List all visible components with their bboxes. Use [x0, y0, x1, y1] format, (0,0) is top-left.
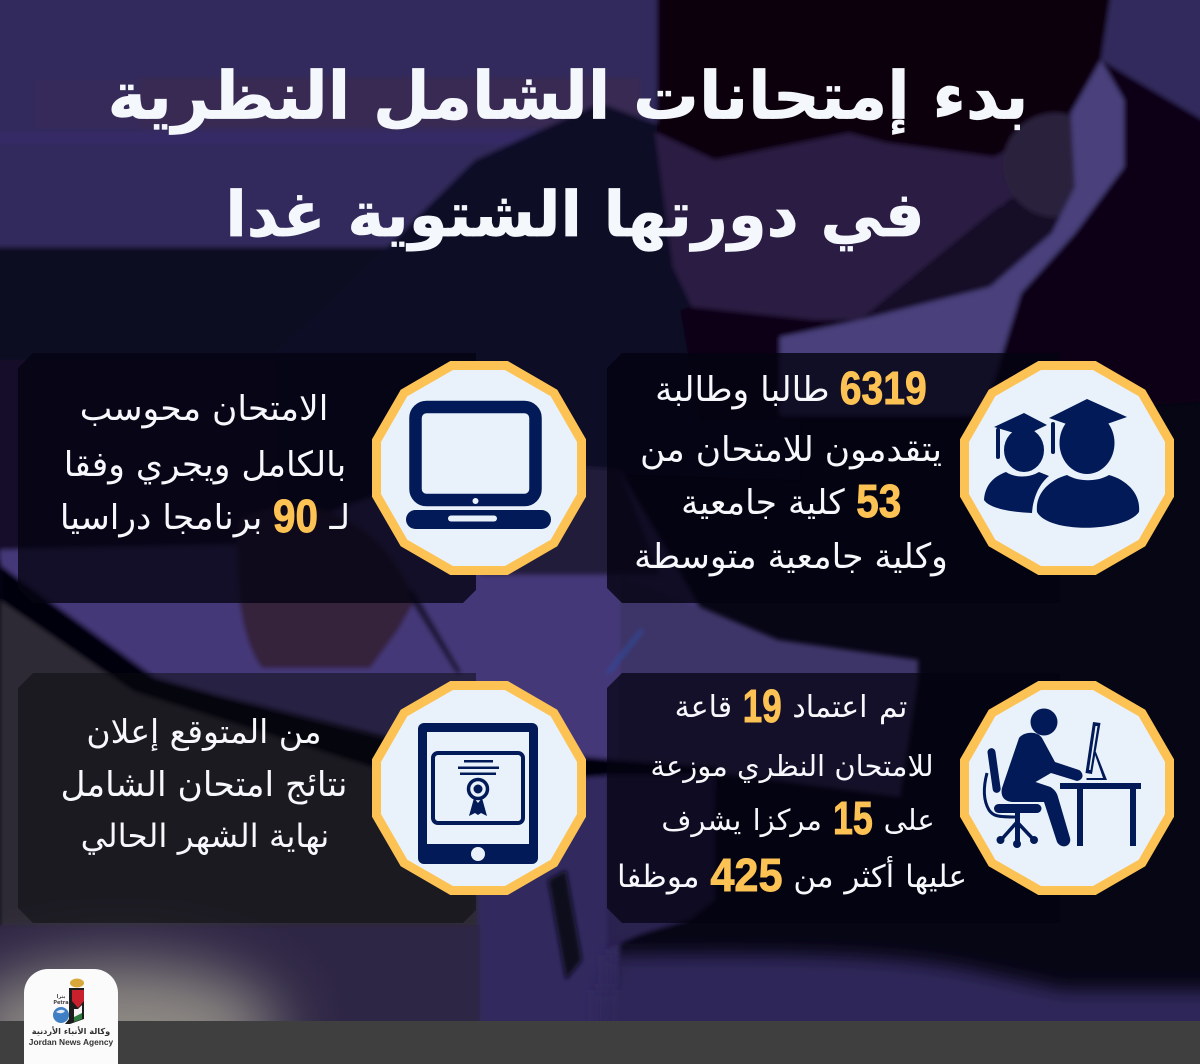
- text: 6319: [840, 362, 927, 414]
- text block: results: [61, 712, 347, 855]
- text: كلية جامعية: [681, 483, 845, 523]
- icon: laptop: [372, 361, 586, 575]
- logo wordmark: بترا: [57, 994, 65, 1000]
- icon: tablet with certificate: [372, 681, 586, 895]
- logo wordmark: [28, 994, 114, 1047]
- text: يتقدمون للامتحان من: [640, 430, 942, 470]
- text block: students: [634, 362, 948, 577]
- text: وكلية جامعية متوسطة: [634, 537, 948, 577]
- text: من المتوقع إعلان: [86, 712, 322, 751]
- text: على مركزا يشرف: [661, 803, 935, 837]
- text: نهاية الشهر الحالي: [81, 817, 329, 855]
- text: عليها أكثر من موظفا: [617, 859, 967, 895]
- text block: computerised exam: [60, 389, 350, 542]
- logo wordmark: Jordan News Agency: [29, 1037, 113, 1047]
- icon: person at computer: [960, 681, 1174, 895]
- text: 53: [856, 475, 901, 527]
- text: 15: [833, 792, 873, 844]
- text: طالبا وطالبة: [655, 370, 830, 410]
- logo: Jordan News Agency: [24, 969, 118, 1064]
- text: 425: [710, 849, 782, 901]
- logo emblem: flag, crown and globe: [53, 978, 84, 1024]
- title: [108, 58, 1028, 252]
- text: 19: [743, 680, 782, 732]
- title: بدء إمتحانات الشامل النظرية: [108, 58, 1028, 134]
- text: للامتحان النظري موزعة: [650, 749, 934, 783]
- text: 90: [273, 490, 318, 542]
- text: تم اعتماد قاعة: [675, 690, 907, 725]
- title: في دورتها الشتوية غدا: [225, 178, 925, 251]
- text: لـ برنامجا دراسيا: [60, 498, 350, 538]
- icon: graduates: [960, 361, 1174, 575]
- logo wordmark: وكالة الأنباء الأردنية: [32, 1026, 110, 1036]
- text: الامتحان محوسب: [80, 389, 328, 429]
- text: بالكامل ويجري وفقا: [64, 445, 346, 485]
- text block: halls and centres: [617, 680, 967, 901]
- logo wordmark: Petra: [53, 1000, 69, 1006]
- text: نتائج امتحان الشامل: [61, 765, 347, 805]
